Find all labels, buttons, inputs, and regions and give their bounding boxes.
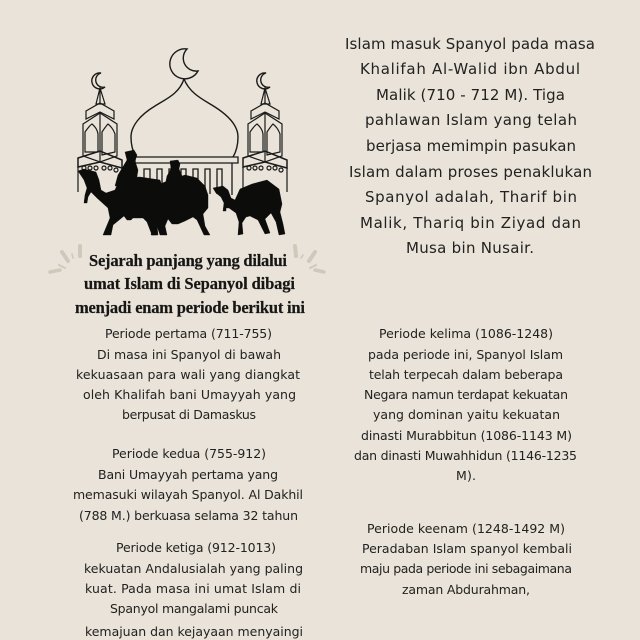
heading: Sejarah panjang yang dilalui (89, 251, 287, 270)
text block: periode keenam: Peradaban Islam spanyol kembali (362, 541, 572, 556)
text block: periode ketiga: kemajuan dan kejayaan menyaingi (85, 624, 303, 639)
heading: umat Islam di Sepanyol dibagi (84, 274, 295, 293)
text block: periode ketiga: kekuatan Andalusialah yang paling (84, 561, 303, 576)
heading: menjadi enam periode berikut ini (75, 298, 305, 317)
text block: periode kelima: dinasti Murabbitun (1086-1143 M) (361, 428, 572, 443)
text block: periode kelima: telah terpecah dalam beberapa (369, 367, 563, 382)
text block: intro: Spanyol adalah, Tharif bin (365, 188, 577, 206)
text block: periode keenam: zaman Abdurahman, (402, 582, 530, 597)
text block: periode pertama (76, 326, 300, 422)
icon: onion dome (131, 79, 238, 157)
text block: periode kedua: (788 M.) berkuasa selama 32 tahun (79, 508, 298, 523)
icon: small camel (213, 180, 285, 235)
text block: periode kelima: Negara namun terdapat kekuatan (364, 387, 568, 402)
decoration: left rays (50, 246, 80, 272)
heading (75, 251, 305, 317)
decoration: right rays (295, 246, 324, 272)
icon: rider one (115, 150, 138, 186)
text block: intro: Khalifah Al-Walid ibn Abdul (360, 60, 580, 78)
text block: intro (345, 35, 595, 257)
text block: intro: Islam dalam proses penaklukan (349, 163, 592, 181)
icon: right minaret (243, 73, 287, 192)
text block: periode kelima: Periode kelima (1086-1248) (379, 326, 553, 341)
text block: intro: pahlawan Islam yang telah (365, 111, 577, 129)
text block: periode pertama: oleh Khalifah bani Umayyah yang (83, 387, 296, 402)
text block: periode kedua: memasuki wilayah Spanyol. Al Dakhil (73, 487, 303, 502)
icon: left minaret (78, 73, 122, 192)
text block: intro: Islam masuk Spanyol pada masa (345, 35, 595, 53)
text block: periode pertama: Di masa ini Spanyol di bawah (97, 347, 281, 362)
text block: periode pertama: kekuasaan para wali yang diangkat (76, 367, 300, 382)
icon: main crescent (170, 49, 198, 79)
text block: periode kedua (73, 446, 303, 523)
icon: rider two (165, 160, 182, 186)
icon: first camel (78, 169, 165, 235)
text block: periode ketiga: kuat. Pada masa ini umat Islam di (85, 581, 301, 596)
text block: periode kelima (354, 326, 577, 483)
text block: periode keenam (360, 521, 572, 597)
icon: mosque wall (135, 157, 238, 195)
text block: intro: Musa bin Nusair. (406, 239, 534, 257)
text block: periode pertama: Periode pertama (711-755) (105, 326, 272, 341)
text block: periode kedua: Bani Umayyah pertama yang (98, 467, 278, 482)
illustration: mosque and camel caravan (78, 49, 287, 235)
text block: periode keenam: maju pada periode ini sebagaimana (360, 561, 572, 576)
text block: periode kedua: Periode kedua (755-912) (112, 446, 266, 461)
text block: intro: Malik, Thariq bin Ziyad dan (360, 214, 581, 232)
text block: periode kelima: M). (456, 468, 476, 483)
icon: mosque (78, 49, 287, 195)
text block: periode pertama: berpusat di Damaskus (122, 407, 256, 422)
text block: periode ketiga (84, 540, 303, 639)
text block: periode kelima: dan dinasti Muwahhidun (1146-1235 (354, 448, 577, 463)
icon: second camel (151, 175, 210, 235)
text block: periode kelima: pada periode ini, Spanyol Islam (368, 347, 563, 362)
text block: periode keenam: Periode keenam (1248-1492 M) (367, 521, 565, 536)
text block: periode kelima: yang dominan yaitu kekuatan (373, 407, 560, 422)
text block: intro: berjasa memimpin pasukan (366, 137, 576, 155)
text block: intro: Malik (710 - 712 M). Tiga (376, 86, 565, 104)
text block: periode ketiga: Spanyol mangalami puncak (110, 601, 279, 616)
icon: camels with riders (78, 150, 285, 235)
text block: periode ketiga: Periode ketiga (912-1013) (116, 540, 276, 555)
